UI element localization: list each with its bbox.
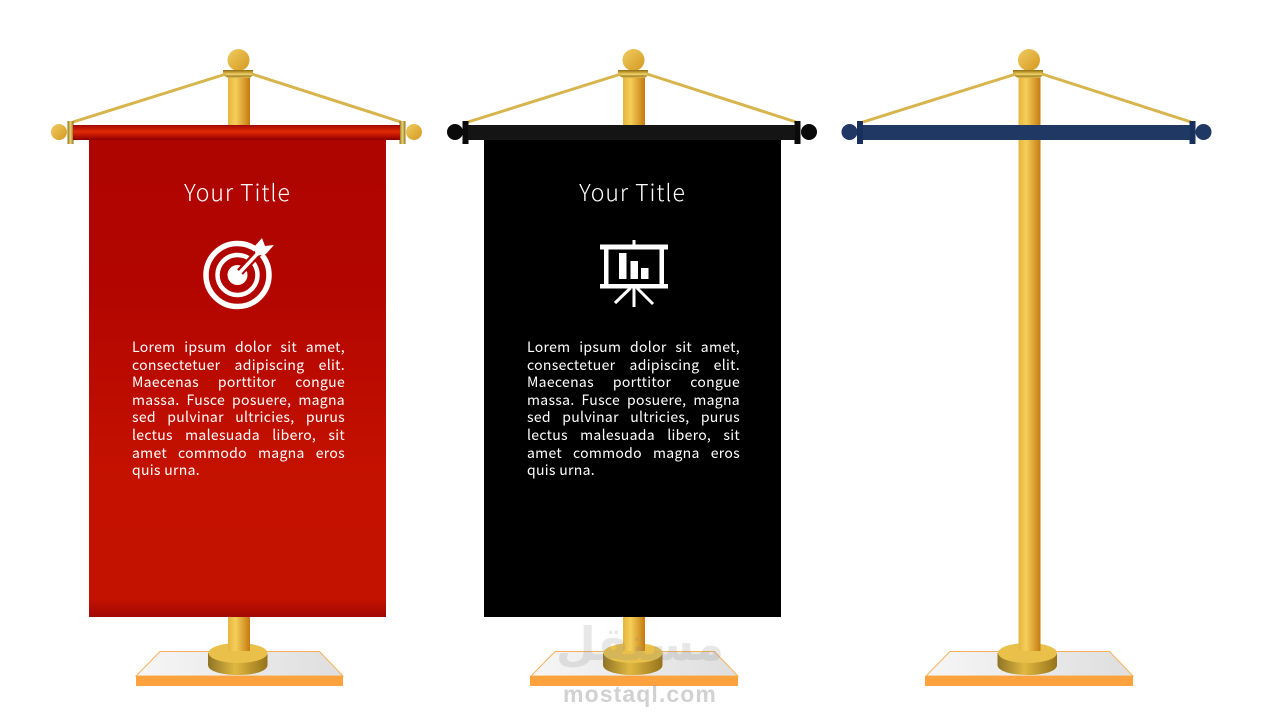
stand 1: red banner bbox=[51, 49, 422, 686]
pole bbox=[1018, 75, 1040, 651]
finial ball bbox=[228, 49, 250, 71]
watermark text: mostaql.com bbox=[563, 681, 717, 707]
body text: red banner: Maecenas porttitor congue bbox=[132, 372, 345, 392]
body text: red banner: amet commodo magna eros bbox=[132, 443, 345, 463]
body text: red banner: Lorem ipsum dolor sit amet, bbox=[132, 337, 345, 357]
body text: black banner: sed pulvinar ultricies, purus bbox=[527, 407, 740, 427]
banner panel bbox=[89, 140, 386, 617]
title: black banner: Your Title bbox=[579, 174, 686, 208]
base disc bbox=[603, 625, 662, 675]
body text: black banner: lectus malesuada libero, sit bbox=[527, 425, 740, 445]
base disc bbox=[208, 625, 268, 675]
body text: black banner: massa. Fusce posuere, magna bbox=[527, 390, 740, 410]
finial ball bbox=[1018, 49, 1040, 71]
finial ball bbox=[622, 49, 644, 71]
ropes bbox=[863, 74, 1191, 122]
watermark logo: مستقل bbox=[556, 617, 724, 671]
collar bbox=[223, 70, 253, 78]
body text: red banner: sed pulvinar ultricies, purus bbox=[132, 407, 345, 427]
icon: target with arrow bbox=[206, 238, 274, 306]
body text: red banner: massa. Fusce posuere, magna bbox=[132, 390, 345, 410]
base disc bbox=[998, 625, 1057, 675]
body text: black banner: Maecenas porttitor congue bbox=[527, 372, 740, 392]
base plate bbox=[925, 652, 1133, 686]
icon: presentation board with bar chart bbox=[600, 240, 668, 307]
stand 2: black banner bbox=[447, 49, 817, 686]
base plate bbox=[136, 652, 343, 686]
body text: red banner: quis urna. bbox=[132, 460, 200, 480]
body text: black banner: consectetuer adipiscing elit. bbox=[527, 355, 740, 375]
body text: black banner: amet commodo magna eros bbox=[527, 443, 740, 463]
collar bbox=[1013, 70, 1043, 78]
title: red banner: Your Title bbox=[184, 174, 291, 208]
body text: red banner: lectus malesuada libero, sit bbox=[132, 425, 345, 445]
hanging bar bbox=[447, 121, 817, 144]
pole bbox=[623, 75, 645, 651]
ropes bbox=[73, 74, 401, 122]
body text: red banner bbox=[132, 337, 345, 480]
hanging bar bbox=[51, 121, 422, 144]
collar bbox=[618, 70, 648, 78]
body text: red banner: consectetuer adipiscing elit. bbox=[132, 355, 345, 375]
banner panel bbox=[484, 140, 781, 617]
hanging bar bbox=[842, 121, 1212, 144]
body text: black banner: quis urna. bbox=[527, 460, 595, 480]
base plate bbox=[530, 652, 738, 686]
ropes bbox=[468, 74, 796, 122]
stand 3: navy bar, no banner bbox=[842, 49, 1212, 686]
pole bbox=[228, 75, 250, 651]
body text: black banner bbox=[527, 337, 740, 480]
body text: black banner: Lorem ipsum dolor sit amet, bbox=[527, 337, 740, 357]
